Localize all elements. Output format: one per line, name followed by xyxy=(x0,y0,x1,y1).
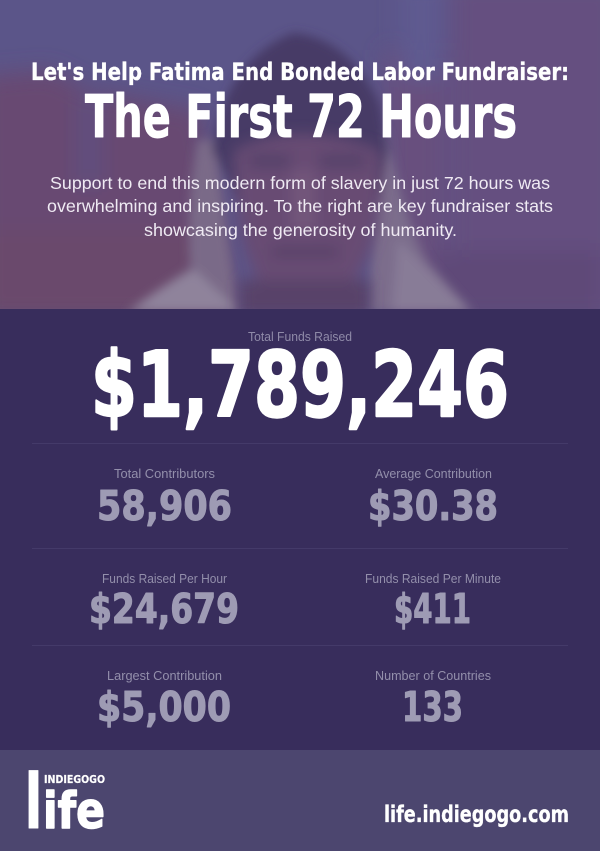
stat: average contribution xyxy=(368,467,498,530)
stat: largest contribution xyxy=(97,669,231,731)
photo shapes: hair xyxy=(212,33,388,200)
stat: total contributors xyxy=(97,467,232,530)
stat: average contribution: Average Contribution xyxy=(375,467,492,481)
stat: average contribution: $30.38 xyxy=(368,482,498,530)
panel: footer xyxy=(0,750,600,851)
logo: Indiegogo Life: l xyxy=(24,757,42,846)
panel: stats background xyxy=(0,309,600,750)
stat: total funds raised: Total Funds Raised xyxy=(248,330,352,344)
photo shapes: headscarf xyxy=(184,136,237,306)
stat: number of countries xyxy=(375,669,491,731)
stat: total contributors: Total Contributors xyxy=(114,467,215,481)
panel: header photo background xyxy=(0,0,600,320)
text block: intro paragraph xyxy=(47,173,553,240)
stat: number of countries: Number of Countries xyxy=(375,669,491,683)
stat: total contributors: 58,906 xyxy=(97,482,232,530)
stat: funds raised per minute xyxy=(365,572,501,633)
stat: funds raised per hour xyxy=(89,572,239,633)
photo shapes: face xyxy=(234,134,381,292)
stat: largest contribution: $5,000 xyxy=(97,683,231,731)
text block: intro paragraph: overwhelming and inspiring. To the right are key fundraiser stats xyxy=(47,196,553,216)
text block: intro paragraph: showcasing the generosity of humanity. xyxy=(144,220,457,240)
stat: funds raised per hour: $24,679 xyxy=(89,585,239,633)
logo: Indiegogo Life xyxy=(24,757,105,846)
stat: funds raised per hour: Funds Raised Per Hour xyxy=(102,572,227,586)
text block: intro paragraph: Support to end this modern form of slavery in just 72 hours was xyxy=(50,173,550,193)
stat: largest contribution: Largest Contribution xyxy=(107,669,222,683)
stat: number of countries: 133 xyxy=(402,683,463,731)
logo: Indiegogo Life: INDIEGOGO xyxy=(44,773,105,786)
stat: funds raised per minute: $411 xyxy=(394,585,471,633)
logo: Indiegogo Life: ife xyxy=(43,782,105,840)
stat: funds raised per minute: Funds Raised Per Minute xyxy=(365,572,501,586)
